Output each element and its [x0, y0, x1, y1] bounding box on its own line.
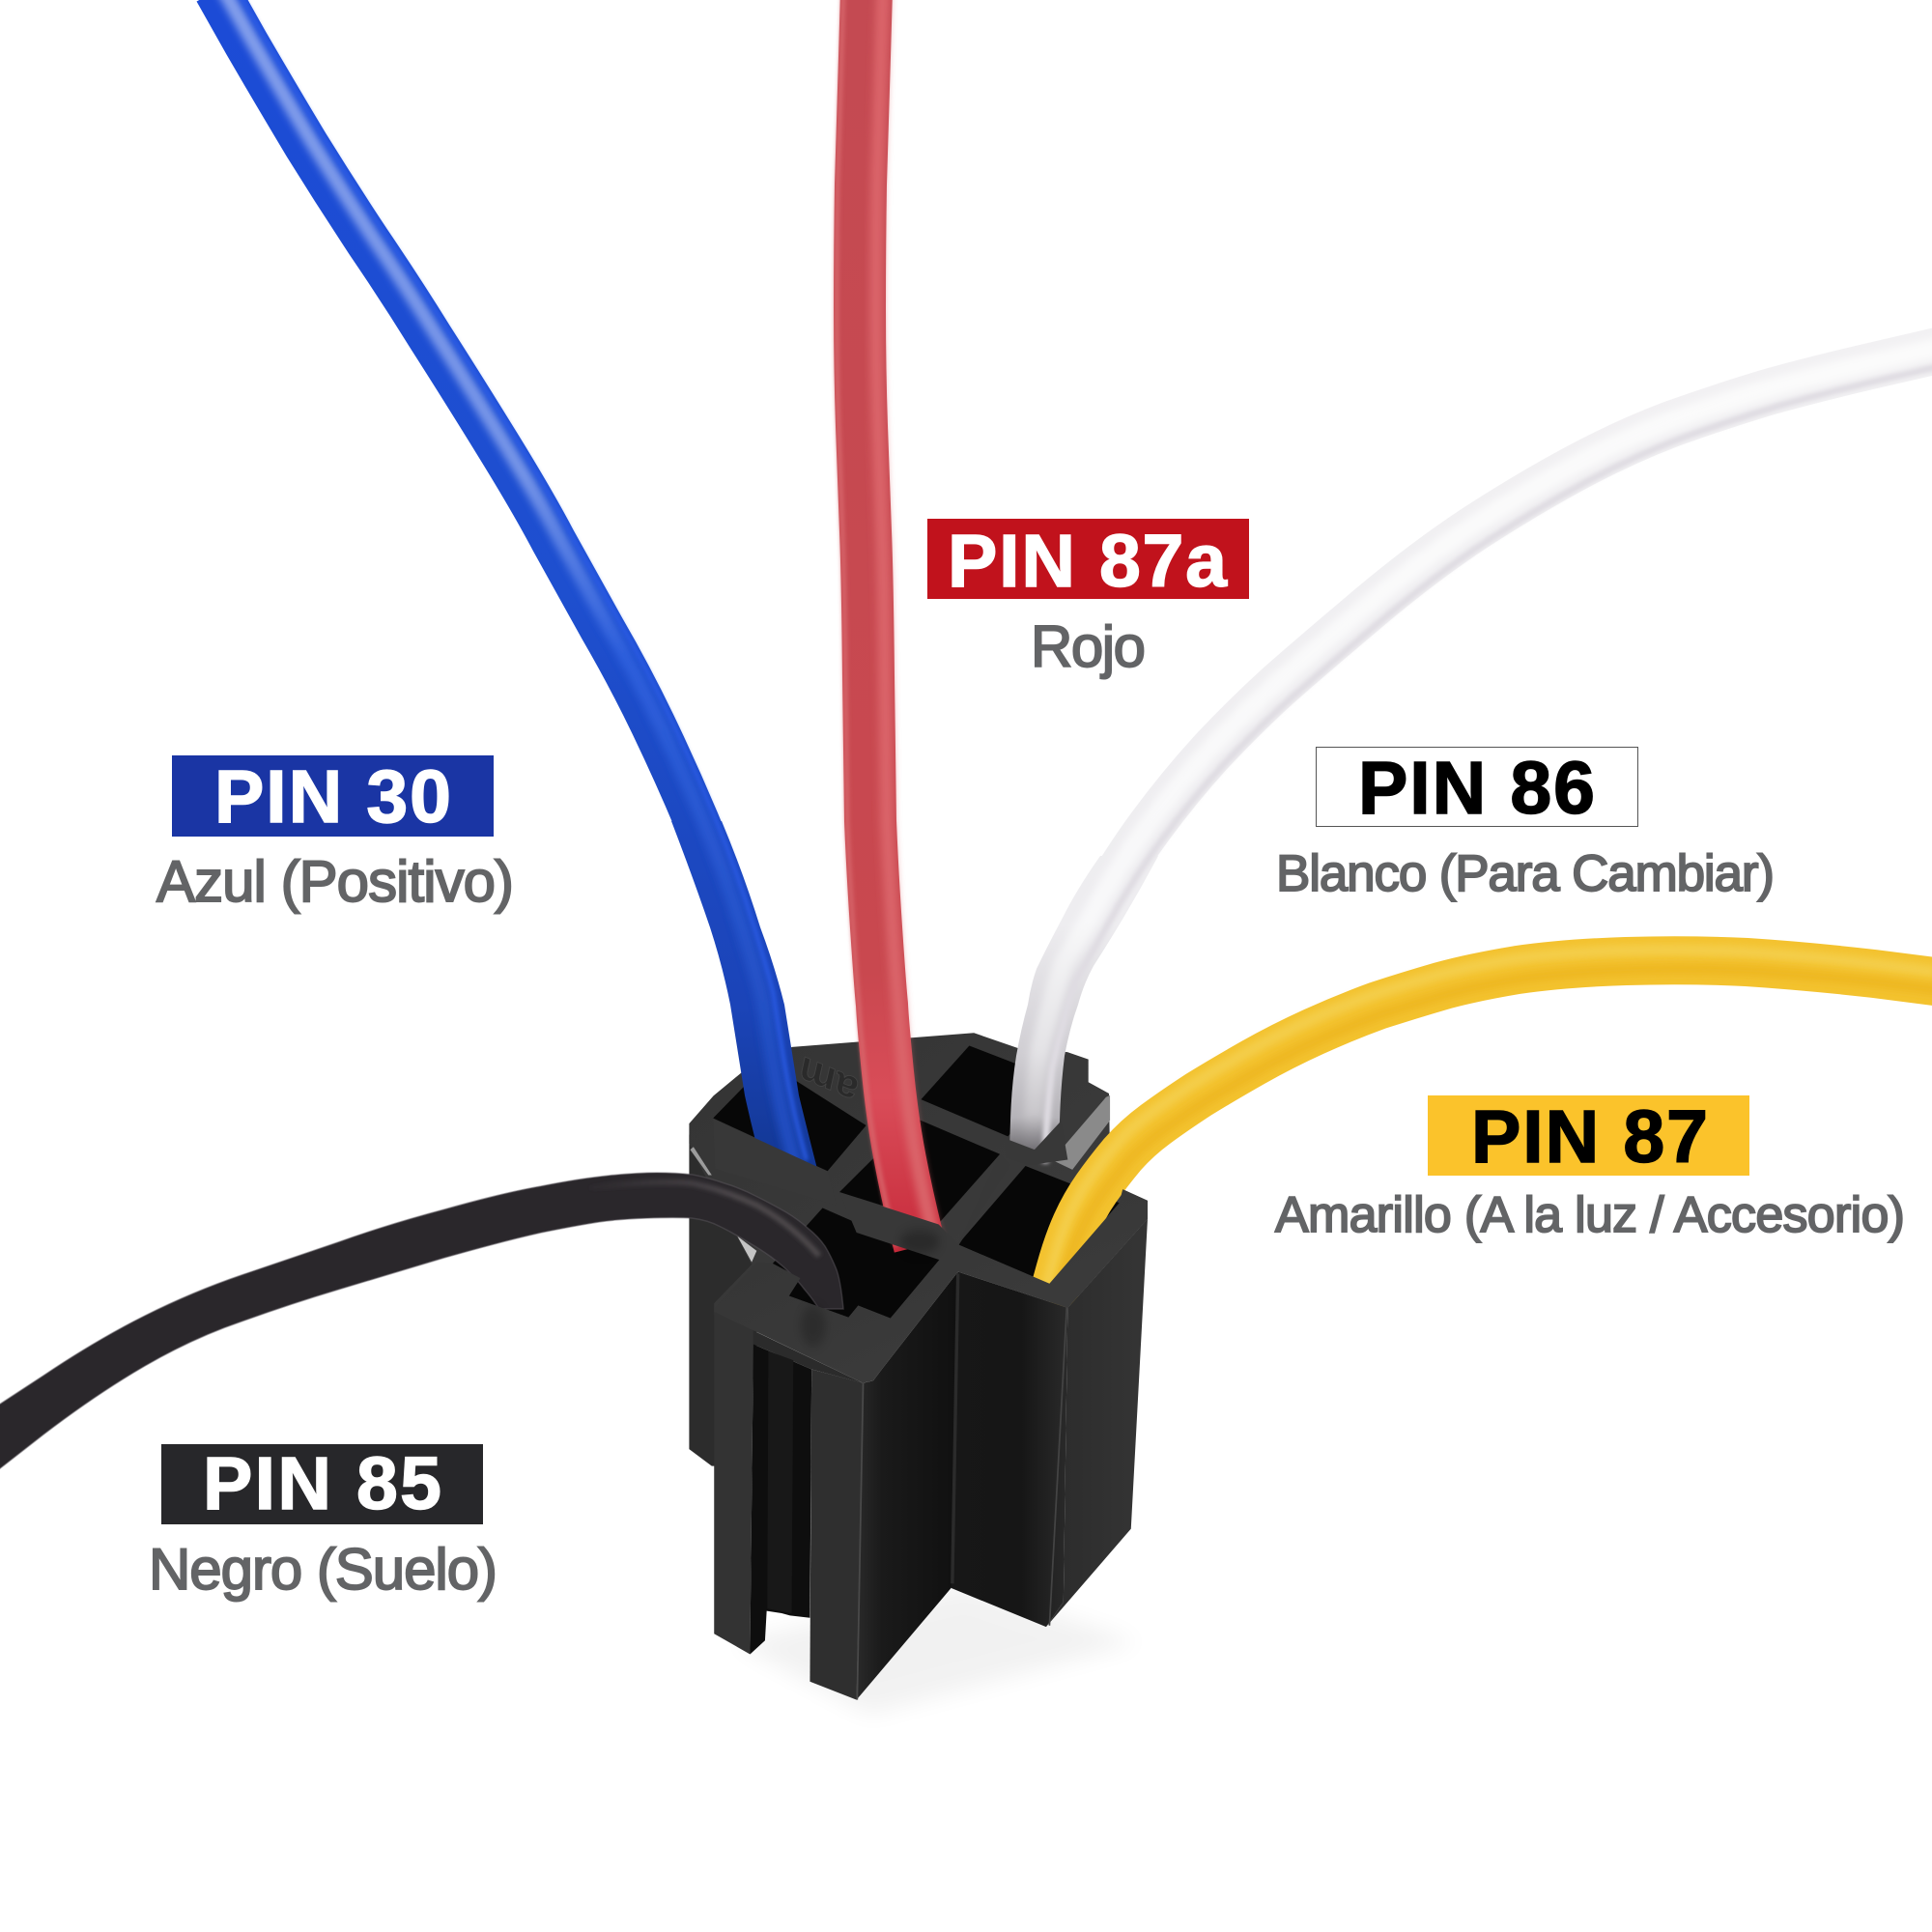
corner highlight inner	[952, 1273, 958, 1583]
caption: Azul: Azul (Positivo)	[156, 849, 514, 914]
label: PIN 87: PIN 87	[1471, 1095, 1708, 1179]
wire: black pin 85	[0, 1173, 843, 1476]
label: PIN 87a: PIN 87a	[948, 520, 1228, 603]
light sliver right	[1052, 1095, 1110, 1170]
label: PIN 85: PIN 85	[203, 1442, 441, 1525]
label: PIN 30: PIN 30	[214, 755, 451, 838]
caption: Rojo: Rojo	[1031, 614, 1146, 679]
rear wall	[689, 1134, 756, 1466]
wall: left pillar	[714, 1312, 753, 1654]
wall: centre left	[857, 1272, 958, 1700]
light sliver left	[690, 1147, 712, 1175]
wire: red pin 87a	[837, 0, 936, 1246]
hole: pin 85	[773, 1208, 940, 1319]
light sliver left lower	[737, 1236, 756, 1263]
socket front walls and rims	[713, 1119, 1148, 1700]
wall: right of groove	[810, 1370, 864, 1700]
caption: Amarillo: Amarillo (A la luz / Accesorio)	[1275, 1187, 1905, 1243]
wire: yellow pin 87	[1046, 950, 1932, 1308]
corner highlight right	[1049, 1308, 1066, 1626]
embossed mark: am	[795, 1047, 862, 1116]
socket rear body and top face with wire holes	[689, 1033, 1148, 1466]
top face	[689, 1033, 1148, 1378]
label: PIN 86: PIN 86	[1358, 747, 1595, 830]
wall: right	[1046, 1219, 1148, 1627]
corner highlight	[857, 1383, 864, 1700]
rim of front blocks	[715, 1189, 1148, 1383]
hole: pin 30	[713, 1063, 867, 1171]
shadow of black wire on rim	[801, 1305, 826, 1347]
wire: blue pin 30	[216, 0, 817, 1169]
groove	[750, 1345, 811, 1654]
rim in front of pin 30 wire	[713, 1119, 837, 1206]
socket floor shadow	[734, 1584, 1140, 1715]
caption: Blanco: Blanco (Para Cambiar)	[1276, 845, 1775, 902]
pin number mark: 1	[731, 1142, 753, 1175]
hole: pin 86	[921, 1045, 1058, 1136]
wire: white pin 86	[1009, 347, 1932, 1163]
hole: pin 87a	[839, 1118, 1000, 1224]
hole: pin 87	[958, 1166, 1120, 1284]
groove rib	[767, 1351, 793, 1613]
rim lip above groove	[753, 1330, 863, 1383]
rim in front of pin 87a wire	[839, 1154, 1010, 1260]
wall: centre right	[952, 1272, 1067, 1627]
caption: Negro: Negro (Suelo)	[149, 1537, 497, 1602]
rim in front of pin 86 wire	[1005, 1121, 1067, 1165]
shadow of red wire on web	[899, 1230, 940, 1254]
